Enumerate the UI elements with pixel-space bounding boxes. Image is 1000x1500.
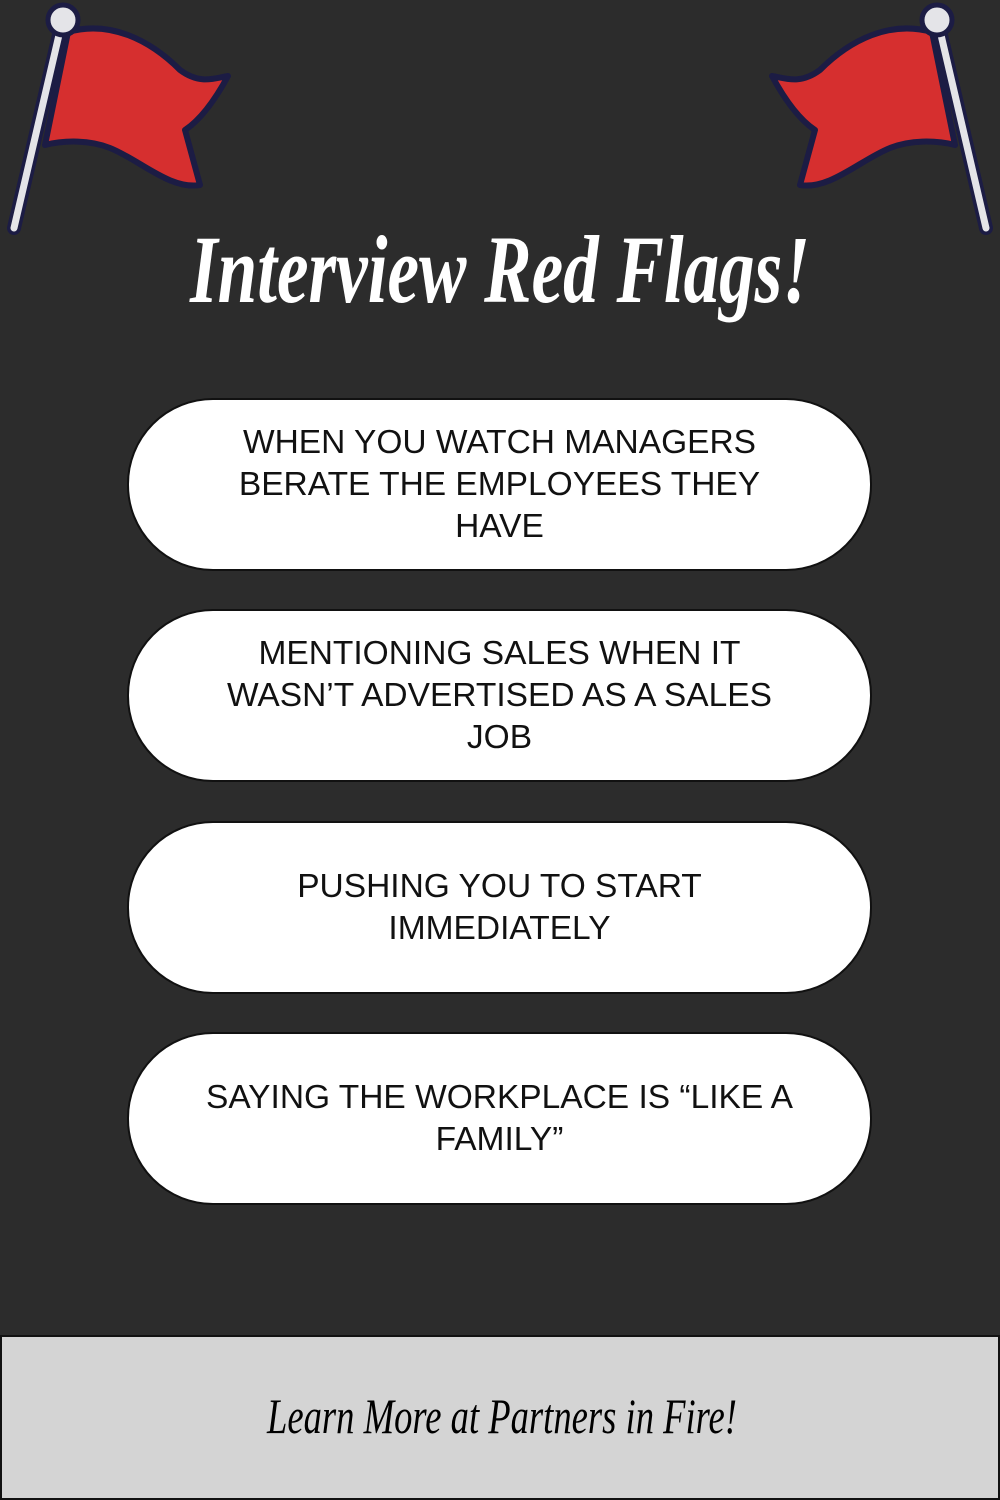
pill: sales job <box>127 609 872 782</box>
pill: berate employees: WHEN YOU WATCH MANAGERS <box>243 424 756 460</box>
pill: berate employees <box>127 398 872 571</box>
pill: sales job: WASN’T ADVERTISED AS A SALES <box>227 676 772 714</box>
icon: right red flag <box>769 2 993 235</box>
pill: sales job: JOB <box>467 718 532 756</box>
pill: start immediately <box>127 821 872 994</box>
pill: berate employees: HAVE <box>455 508 544 544</box>
pill: like a family <box>127 1032 872 1205</box>
footer <box>0 1335 1000 1500</box>
pill: like a family: SAYING THE WORKPLACE IS “LIKE A <box>206 1078 793 1116</box>
pill: start immediately: PUSHING YOU TO START <box>297 868 702 904</box>
pill: berate employees: BERATE THE EMPLOYEES THEY <box>239 466 760 502</box>
icon: left red flag <box>7 2 231 235</box>
pill: start immediately: IMMEDIATELY <box>388 910 611 946</box>
pill: sales job: MENTIONING SALES WHEN IT <box>258 634 741 672</box>
pill: like a family: FAMILY” <box>436 1120 563 1158</box>
